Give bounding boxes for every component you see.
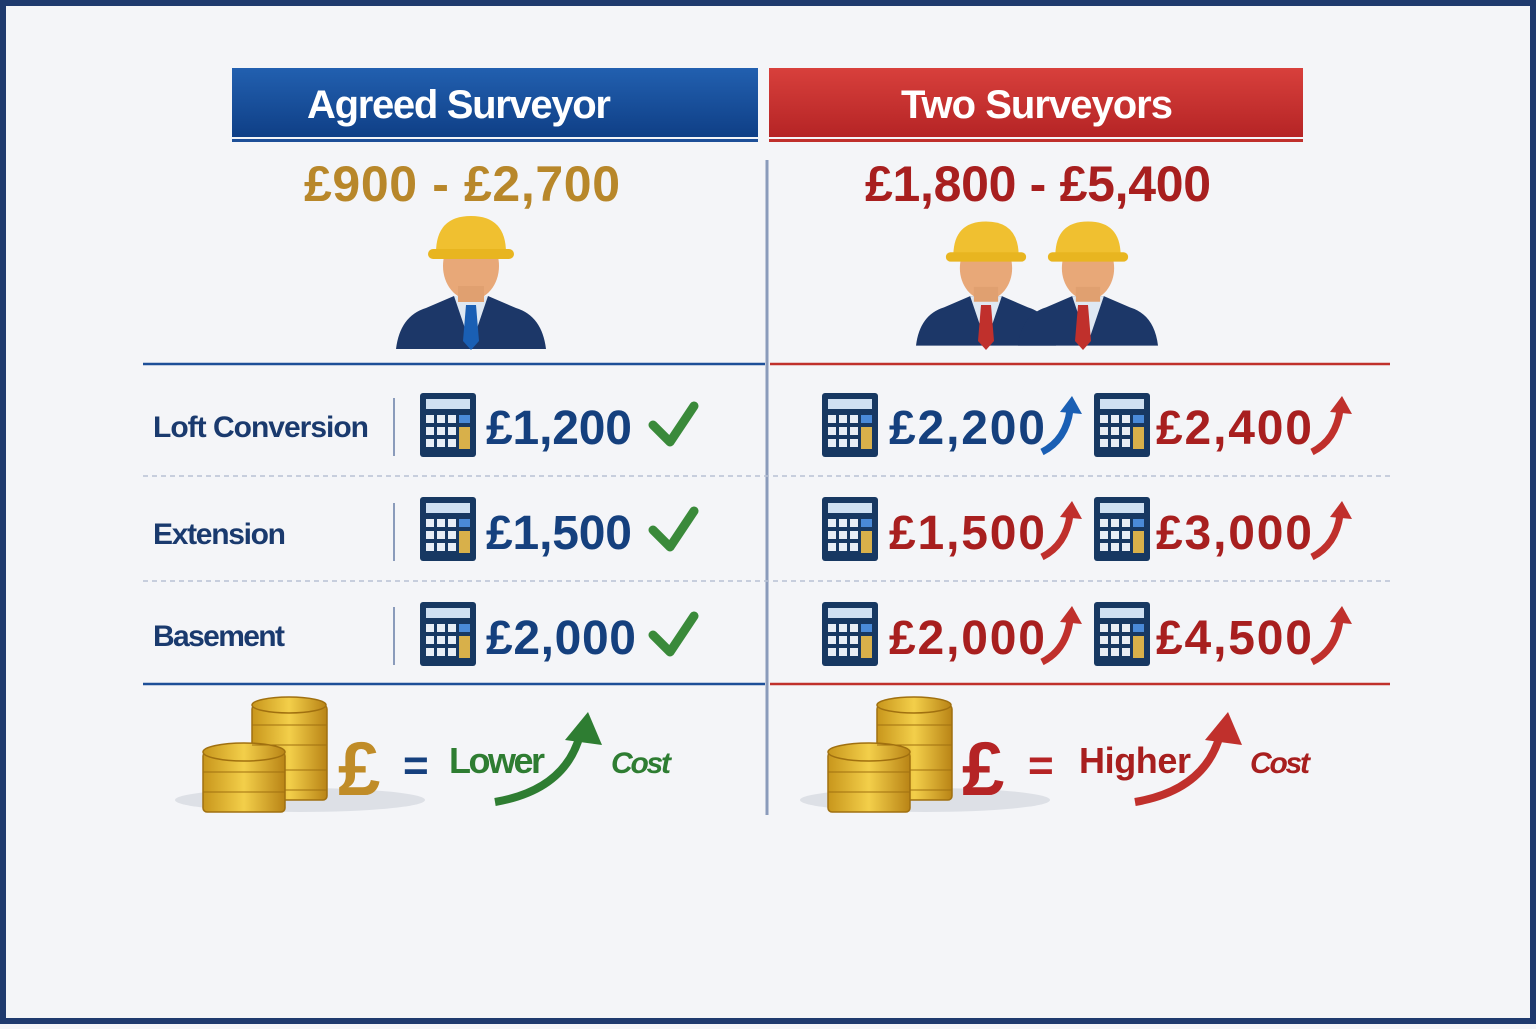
left values: [420, 393, 694, 666]
left values: £1,200: [486, 402, 632, 455]
right values: £2,200: [889, 402, 1045, 455]
left values: £2,000: [486, 612, 636, 665]
price left: £900 - £2,700: [304, 156, 620, 212]
icon: two surveyors: [916, 222, 1158, 350]
row labels: [153, 411, 369, 653]
right values: £2,400: [1156, 402, 1312, 455]
bottom left: lower cost: Lower: [449, 740, 545, 781]
right values: [822, 393, 1352, 666]
bottom left: lower cost: =: [403, 741, 429, 790]
row labels: Extension: [153, 518, 286, 551]
header: Agreed Surveyor: Agreed Surveyor: [307, 83, 611, 127]
bottom left: lower cost: £: [338, 727, 380, 812]
bottom right: higher cost: [800, 697, 1312, 812]
right values: £3,000: [1156, 507, 1312, 560]
right values: £2,000: [889, 612, 1045, 665]
header: Agreed Surveyor: [232, 68, 758, 142]
bottom left: lower cost: Cost: [611, 747, 673, 780]
header: Two Surveyors: [769, 68, 1303, 142]
bottom right: higher cost: Higher: [1079, 740, 1191, 781]
bottom right: higher cost: £: [962, 727, 1004, 812]
left values: £1,500: [486, 507, 632, 560]
row labels: Loft Conversion: [153, 411, 369, 444]
bottom right: higher cost: =: [1028, 741, 1054, 790]
icon: surveyor: [396, 216, 546, 350]
row labels: Basement: [153, 620, 285, 653]
bottom left: lower cost: [175, 697, 673, 812]
bottom right: higher cost: Cost: [1250, 747, 1312, 780]
header: Two Surveyors: Two Surveyors: [901, 83, 1173, 127]
right values: £4,500: [1156, 612, 1312, 665]
price right: £1,800 - £5,400: [865, 156, 1211, 212]
right values: £1,500: [889, 507, 1045, 560]
